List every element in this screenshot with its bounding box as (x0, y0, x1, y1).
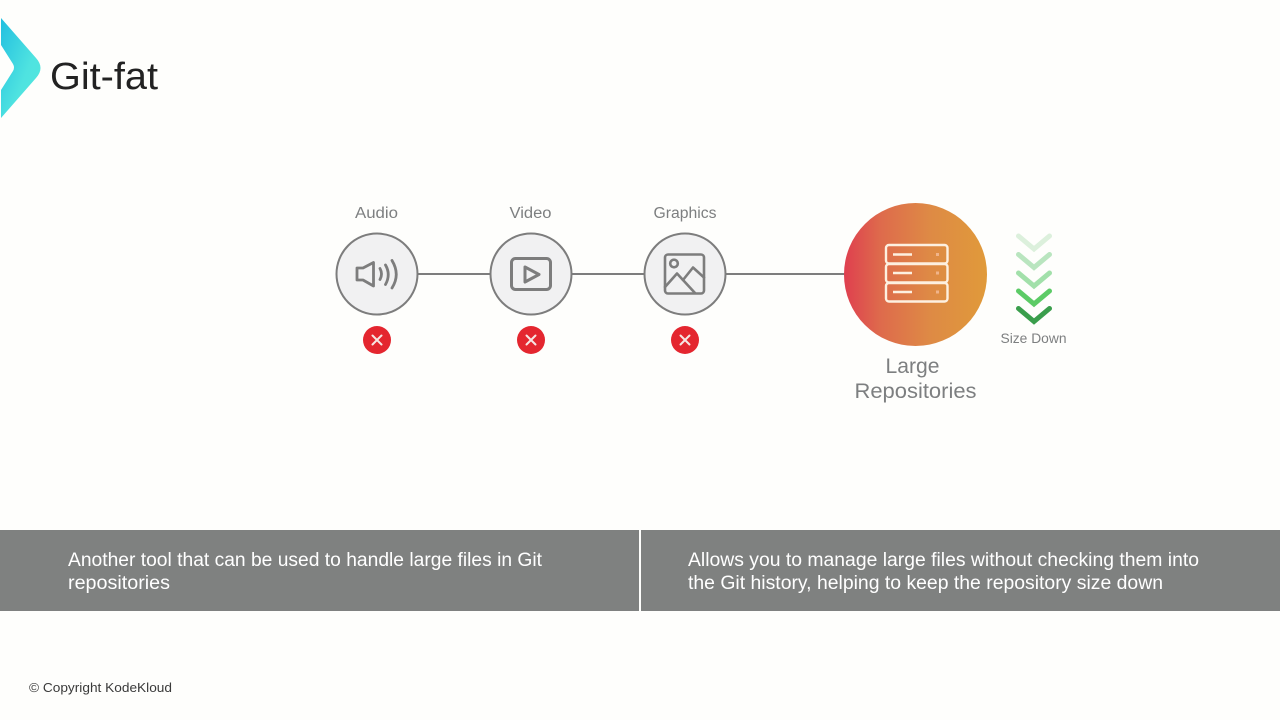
copyright: © Copyright KodeKloud (29, 680, 172, 695)
repository circle (844, 203, 987, 346)
left description text: Another tool that can be used to handle large files in Git (68, 550, 543, 571)
size down chevrons (1018, 236, 1050, 322)
video circle (490, 234, 572, 314)
label: video: Video (510, 205, 552, 222)
label: large repositories: Repositories (854, 379, 976, 403)
icon: server stack (886, 245, 948, 302)
label: audio: Audio (355, 205, 398, 222)
icon: image (665, 254, 704, 294)
node: large repositories (844, 203, 987, 403)
audio circle (336, 234, 418, 314)
panel: left description (0, 530, 639, 611)
right description text: the Git history, helping to keep the repository size down (688, 573, 1163, 594)
label: size down: Size Down (1000, 330, 1066, 346)
right description text: Allows you to manage large files without checking them into (688, 550, 1199, 571)
badge: rejected video (517, 326, 545, 354)
node: graphics (644, 205, 726, 354)
badge: rejected graphics (671, 326, 699, 354)
icon: speaker (357, 260, 396, 288)
label: large repositories: Large (886, 354, 940, 378)
label: graphics: Graphics (654, 205, 717, 222)
title: Git-fat (50, 56, 158, 98)
icon: play (512, 258, 550, 290)
logo mark (1, 18, 40, 118)
left description text: repositories (68, 573, 170, 594)
badge: rejected audio (363, 326, 391, 354)
connector line (417, 273, 846, 275)
panel: right description (641, 530, 1280, 611)
graphics circle (644, 234, 726, 314)
node: audio (336, 205, 418, 354)
node: video (490, 205, 572, 354)
